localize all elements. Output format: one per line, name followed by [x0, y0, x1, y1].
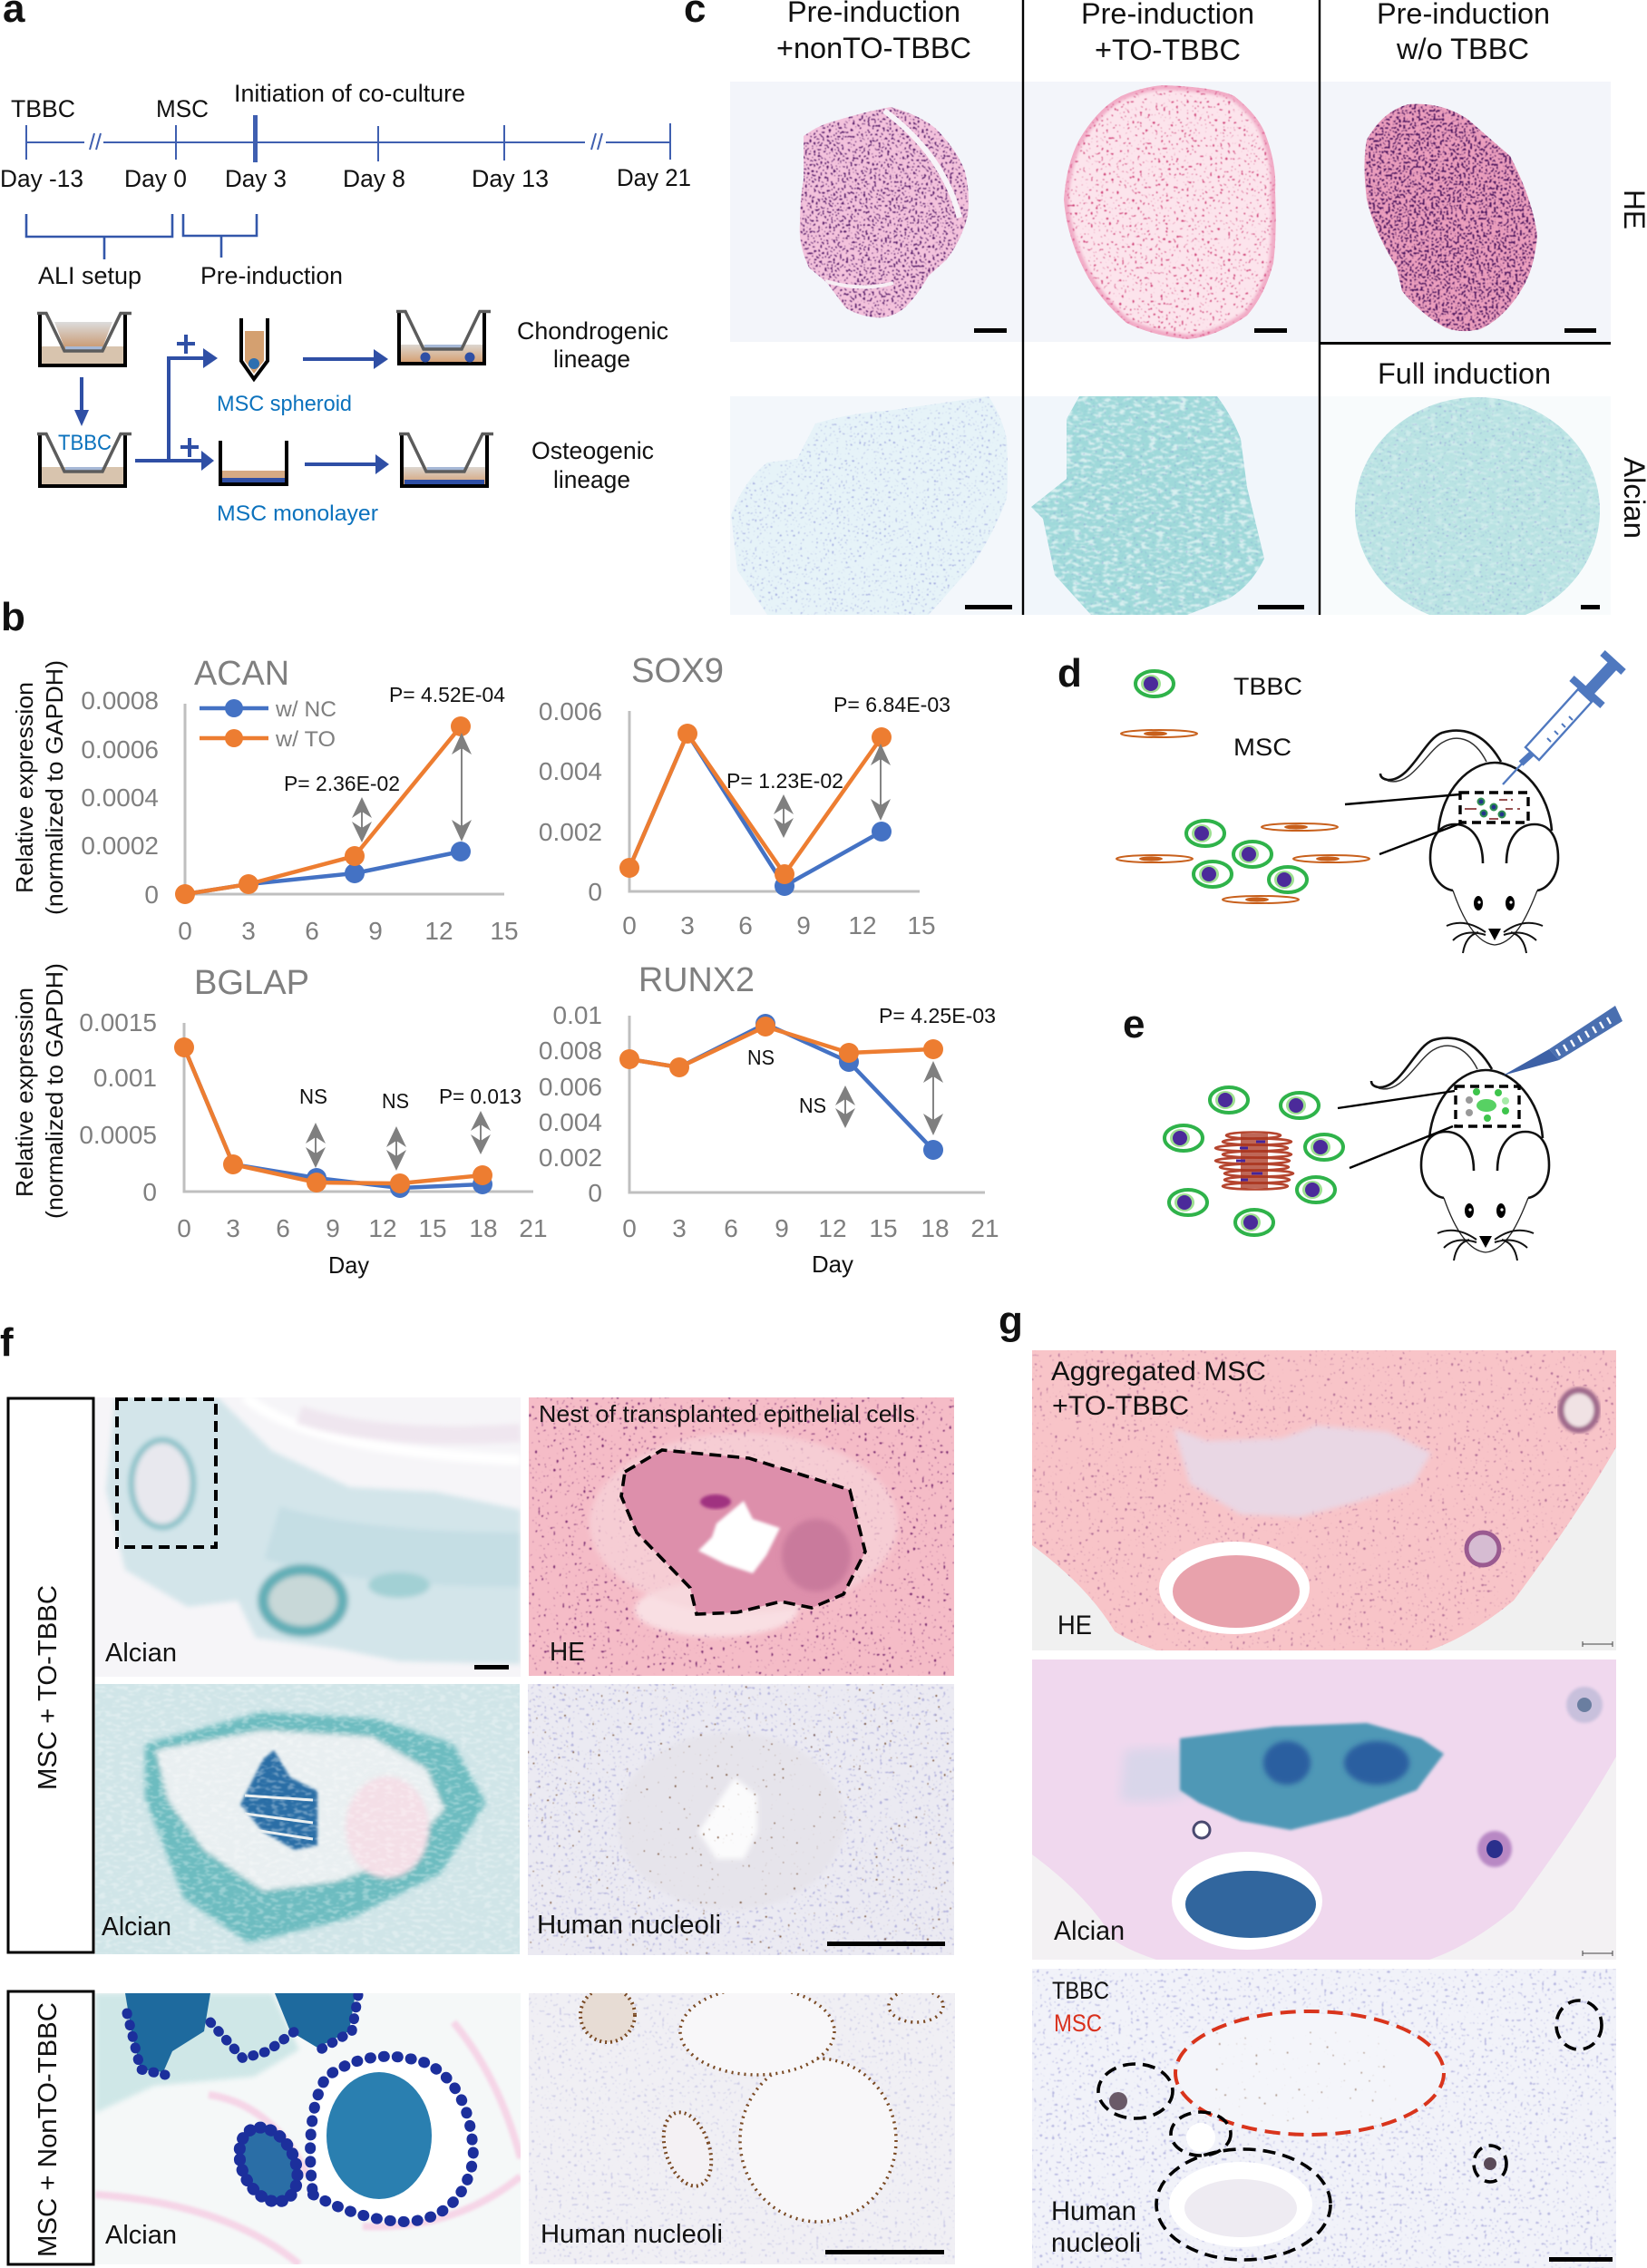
scale bar: [827, 1942, 945, 1946]
chart: ACAN: 3: [241, 917, 256, 945]
chart: ACAN: 0.0006: [81, 735, 159, 764]
sub-heading: Full induction: Full induction: [1378, 357, 1551, 390]
lineage labels: [517, 317, 668, 493]
chart: SOX9: [539, 652, 950, 939]
injection site: [1460, 793, 1528, 823]
timeline labels: Day 21: [617, 164, 691, 191]
tube: MSC spheroid: [217, 318, 352, 416]
mouse: [1371, 1038, 1549, 1261]
label TBBC: TBBC: [1052, 1977, 1109, 2004]
label Human nucleoli: Human: [1051, 2196, 1136, 2226]
bracket: Pre-induction: Pre-induction: [200, 262, 343, 289]
TBBC cells: [1165, 1087, 1343, 1235]
column headers: +TO-TBBC: [1095, 34, 1241, 66]
chart: ACAN: 0: [178, 917, 192, 945]
legend: MSC: [1121, 730, 1291, 761]
caption: Aggregated MSC +TO-TBBC: +TO-TBBC: [1052, 1391, 1189, 1421]
timeline labels: Initiation of co-culture: [234, 80, 465, 107]
lineage labels: lineage: [553, 466, 630, 493]
chart: ACAN: 12: [424, 917, 453, 945]
image: HE TO-TBBC: [1024, 82, 1318, 345]
chart: RUNX2: NS: [747, 1046, 775, 1069]
timeline axis: [26, 115, 670, 162]
well: TBBC: TBBC: [58, 431, 112, 455]
lineage labels: Osteogenic: [531, 437, 654, 464]
chart: ACAN: 6: [305, 917, 319, 945]
chart: ACAN: 0.0008: [81, 686, 159, 715]
timeline labels: [0, 80, 691, 192]
chart: BGLAP: [79, 964, 548, 1242]
x axis title left: Day: [328, 1251, 369, 1279]
row box: MSC + NonTO-TBBC: MSC + NonTO-TBBC: [34, 2002, 63, 2257]
bracket: ALI setup: ALI setup: [38, 262, 141, 289]
chart: ACAN: 0.0002: [81, 832, 159, 860]
image: Alcian detail: [95, 1684, 520, 1954]
panel label e: e: [1123, 1002, 1145, 1046]
chart: BGLAP: NS: [299, 1085, 327, 1108]
y axis title bottom: Relative expression: [11, 988, 38, 1197]
image: HE w/o TBBC: [1321, 82, 1611, 342]
label Alcian: Alcian: [102, 1913, 171, 1942]
chart: SOX9: P= 1.23E-02: [726, 769, 843, 793]
bracket: ALI setup: [26, 214, 172, 289]
image: Alcian TO-TBBC: [1024, 396, 1318, 615]
label Human nucleoli: Human nucleoli: [537, 1911, 721, 1940]
well: chondrogenic: [396, 310, 491, 364]
legend: TBBC: TBBC: [1233, 673, 1302, 700]
MSC aggregate: [1215, 1132, 1293, 1190]
icon: pipette tip: [1503, 1006, 1623, 1076]
chart: RUNX2: 0.008: [539, 1037, 602, 1065]
legend: [200, 697, 336, 752]
chart: ACAN: 9: [368, 917, 383, 945]
leader lines: [1345, 794, 1463, 854]
chart: SOX9: 0: [622, 911, 637, 939]
scale bar: [825, 2250, 944, 2254]
column headers: [776, 0, 1550, 66]
branching arrows with plus signs: [135, 335, 218, 471]
chart: RUNX2: 12: [818, 1214, 847, 1242]
label Human nucleoli: Human nucleoli: [541, 2220, 723, 2249]
y axis title top: (normalized to GAPDH): [41, 660, 68, 915]
legend: w/ NC: [275, 697, 336, 722]
chart: RUNX2: 0: [622, 1214, 637, 1242]
label Alcian: Alcian: [105, 1639, 177, 1668]
column headers: +nonTO-TBBC: [776, 32, 971, 64]
row box: MSC + NonTO-TBBC: [8, 1991, 93, 2264]
tube: MSC spheroid: MSC spheroid: [217, 392, 352, 416]
legend: TBBC: [1135, 671, 1302, 700]
chart: ACAN: ACAN: [194, 655, 289, 693]
chart: BGLAP: 3: [226, 1214, 240, 1242]
row box: MSC + TO-TBBC: [8, 1398, 93, 1952]
chart: SOX9: P= 6.84E-03: [833, 693, 950, 716]
chart: RUNX2: 18: [921, 1214, 950, 1242]
timeline labels: Day 13: [472, 165, 549, 192]
dashed outlines: TBBC nests: [1098, 2000, 1602, 2260]
lineage labels: lineage: [553, 346, 630, 373]
chart: ACAN: P= 4.52E-04: [389, 683, 505, 706]
y axis title top: Relative expression: [11, 682, 38, 893]
mixed cells: [1116, 821, 1369, 903]
image: Alcian full induction: [1355, 397, 1600, 615]
image: Alcian overview: [95, 1397, 521, 1677]
chart: RUNX2: P= 4.25E-03: [879, 1004, 996, 1027]
dashed outline: MSC region: [1175, 2011, 1444, 2135]
chart: RUNX2: 15: [869, 1214, 898, 1242]
label Human nucleoli: [1051, 2196, 1141, 2258]
chart: BGLAP: NS: [382, 1089, 409, 1113]
label Human nucleoli: nucleoli: [1051, 2228, 1141, 2258]
chart: BGLAP: 0.0005: [79, 1121, 157, 1149]
scale bars: [965, 328, 1600, 609]
chart: SOX9: SOX9: [631, 652, 724, 690]
y axis title bottom: [11, 963, 68, 1219]
label Alcian: Alcian: [1054, 1916, 1125, 1946]
caption: nest: Nest of transplanted epithelial cells: [539, 1400, 915, 1427]
chart: RUNX2: 3: [672, 1214, 687, 1242]
panel label f: f: [0, 1320, 14, 1365]
label HE: HE: [550, 1638, 585, 1667]
timeline labels: Day 0: [124, 165, 187, 192]
chart: RUNX2: 0: [588, 1179, 602, 1207]
chart: BGLAP: 0.0015: [79, 1008, 157, 1037]
chart: SOX9: 9: [796, 911, 811, 939]
transplant site: [1456, 1086, 1519, 1126]
chart: RUNX2: 0.002: [539, 1144, 602, 1172]
legend: MSC: MSC: [1233, 734, 1291, 761]
chart: RUNX2: 6: [724, 1214, 738, 1242]
arrow to osteogenic well: [305, 454, 389, 474]
label MSC: MSC: [1054, 2010, 1102, 2037]
chart: RUNX2: 0.004: [539, 1108, 602, 1136]
chart: BGLAP: 0.001: [93, 1064, 157, 1092]
image: HE nest: [529, 1397, 954, 1676]
well: ALI setup: [37, 312, 132, 365]
timeline labels: Day -13: [0, 165, 83, 192]
image: HE: [1032, 1350, 1616, 1650]
scale bar: [474, 1665, 509, 1669]
legend: w/ TO: [275, 727, 336, 752]
chart: RUNX2: 0.006: [539, 1073, 602, 1101]
chart: BGLAP: 0: [177, 1214, 191, 1242]
caption: Aggregated MSC +TO-TBBC: [1051, 1357, 1266, 1421]
timeline labels: Day 8: [343, 165, 405, 192]
chart: SOX9: 6: [738, 911, 753, 939]
chart: ACAN: 0.0004: [81, 784, 159, 812]
label HE: HE: [1057, 1611, 1092, 1640]
chart: RUNX2: 0.01: [553, 1001, 602, 1029]
chart: RUNX2: [539, 961, 999, 1242]
panel d: syringe injection of cells into mouse: [1057, 651, 1623, 953]
chart: BGLAP: 15: [418, 1214, 447, 1242]
timeline labels: TBBC: [11, 95, 75, 122]
scale mini: [1583, 1641, 1613, 1647]
label Alcian: Alcian: [105, 2221, 177, 2250]
x axis title right: Day: [812, 1251, 853, 1278]
icon: syringe: [1503, 653, 1623, 784]
scale bar: [1549, 2257, 1613, 2262]
chart: SOX9: 0.002: [539, 818, 602, 846]
dish: MSC monolayer: MSC monolayer: [217, 501, 378, 526]
bracket: Pre-induction: [183, 214, 343, 289]
chart: ACAN: 15: [490, 917, 519, 945]
panel b: gene expression charts: [1, 595, 999, 1279]
chart: BGLAP: 9: [326, 1214, 340, 1242]
lineage labels: Chondrogenic: [517, 317, 668, 345]
chart: BGLAP: 0: [142, 1178, 157, 1206]
image: Alcian: [1032, 1660, 1616, 1960]
chart: BGLAP: 6: [276, 1214, 290, 1242]
panel label b: b: [1, 595, 25, 639]
leader lines: [1338, 1091, 1455, 1168]
chart: SOX9: 0.006: [539, 697, 602, 725]
chart: ACAN: [81, 655, 519, 945]
dashed inset box: [117, 1399, 216, 1547]
dashed nest outline: [621, 1450, 865, 1614]
image: Alcian NonTO: [95, 1993, 521, 2264]
chart: SOX9: 3: [680, 911, 695, 939]
y axis title top: [11, 660, 68, 915]
image: human nucleoli detail: [528, 1684, 954, 1955]
panel label g: g: [999, 1299, 1023, 1343]
chart: SOX9: 12: [848, 911, 877, 939]
caption: Aggregated MSC +TO-TBBC: Aggregated MSC: [1051, 1357, 1266, 1387]
chart: BGLAP: P= 0.013: [439, 1085, 521, 1108]
chart: SOX9: 0.004: [539, 757, 602, 785]
timeline labels: MSC: [156, 95, 209, 122]
chart: BGLAP: 12: [368, 1214, 397, 1242]
image: human nucleoli: [1032, 1969, 1616, 2268]
panel e: aggregated MSC with pipette: [1123, 1002, 1623, 1261]
panel label d: d: [1057, 651, 1082, 696]
timeline labels: Day 3: [225, 165, 287, 192]
arrow: down to TBBC well: [74, 377, 89, 426]
dividers: [1023, 0, 1320, 615]
panel g: aggregated MSC histology: [999, 1299, 1616, 2268]
well: osteogenic: [399, 433, 493, 486]
chart: BGLAP: 21: [519, 1214, 548, 1242]
scale mini: [1583, 1951, 1613, 1956]
image: HE nonTO-TBBC: [730, 82, 1022, 342]
mouse: [1380, 731, 1558, 953]
row box: MSC + TO-TBBC: MSC + TO-TBBC: [34, 1585, 63, 1790]
image: human nucleoli NonTO: [529, 1988, 955, 2264]
panel c: histology grid: [684, 0, 1647, 615]
dish: MSC monolayer: [217, 441, 378, 526]
image: Alcian nonTO-TBBC: [730, 396, 1022, 615]
chart: ACAN: P= 2.36E-02: [284, 772, 400, 795]
well: TBBC: [37, 431, 132, 486]
panel f: histology MSC with TBBC: [0, 1320, 955, 2264]
chart: BGLAP: 18: [469, 1214, 498, 1242]
chart: RUNX2: RUNX2: [638, 961, 755, 999]
chart: RUNX2: 9: [775, 1214, 789, 1242]
chart: RUNX2: NS: [799, 1094, 826, 1117]
chart: SOX9: 0: [588, 878, 602, 906]
arrow to chondrogenic well: [303, 349, 388, 369]
panel a: timeline and culture schematic: [0, 0, 691, 526]
chart: RUNX2: 21: [970, 1214, 999, 1242]
column headers: w/o TBBC: [1396, 33, 1529, 65]
chart: SOX9: 15: [907, 911, 936, 939]
chart: BGLAP: BGLAP: [194, 964, 309, 1002]
y axis title bottom: (normalized to GAPDH): [41, 963, 68, 1219]
chart: ACAN: 0: [144, 881, 159, 909]
